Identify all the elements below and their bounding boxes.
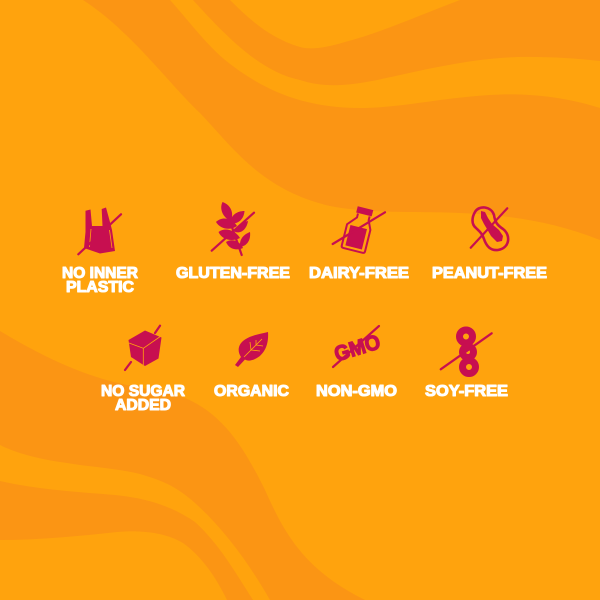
label: no inner plastic: PLASTIC — [66, 279, 134, 296]
top wave: large band — [83, 0, 600, 240]
icon: peanut-free — [471, 207, 508, 250]
icon: gluten-free wheat — [212, 202, 254, 255]
bottom wave: lower band — [0, 481, 253, 600]
label: no sugar added — [101, 383, 185, 414]
top wave: upper band — [193, 0, 600, 85]
icon: soy-free — [441, 330, 492, 374]
label: non-gmo: NON-GMO — [316, 383, 397, 400]
label: peanut-free: PEANUT-FREE — [432, 265, 547, 282]
label: no sugar added: NO SUGAR — [101, 383, 185, 400]
icon: no plastic bag — [78, 208, 121, 254]
label: dairy-free: DAIRY-FREE — [309, 265, 409, 282]
icon: organic leaf — [235, 332, 268, 367]
label: organic: ORGANIC — [214, 383, 289, 400]
label: no inner plastic — [62, 265, 138, 296]
icon: dairy-free bottle — [333, 205, 385, 253]
bottom wave: large band — [0, 331, 365, 600]
label: soy-free: SOY-FREE — [425, 383, 508, 400]
label: gluten-free: GLUTEN-FREE — [176, 265, 290, 282]
icon: non-GMO: GMO — [332, 331, 383, 366]
icon: no sugar cube — [125, 326, 162, 370]
label: no sugar added: ADDED — [115, 397, 171, 414]
label: no inner plastic: NO INNER — [62, 265, 138, 282]
